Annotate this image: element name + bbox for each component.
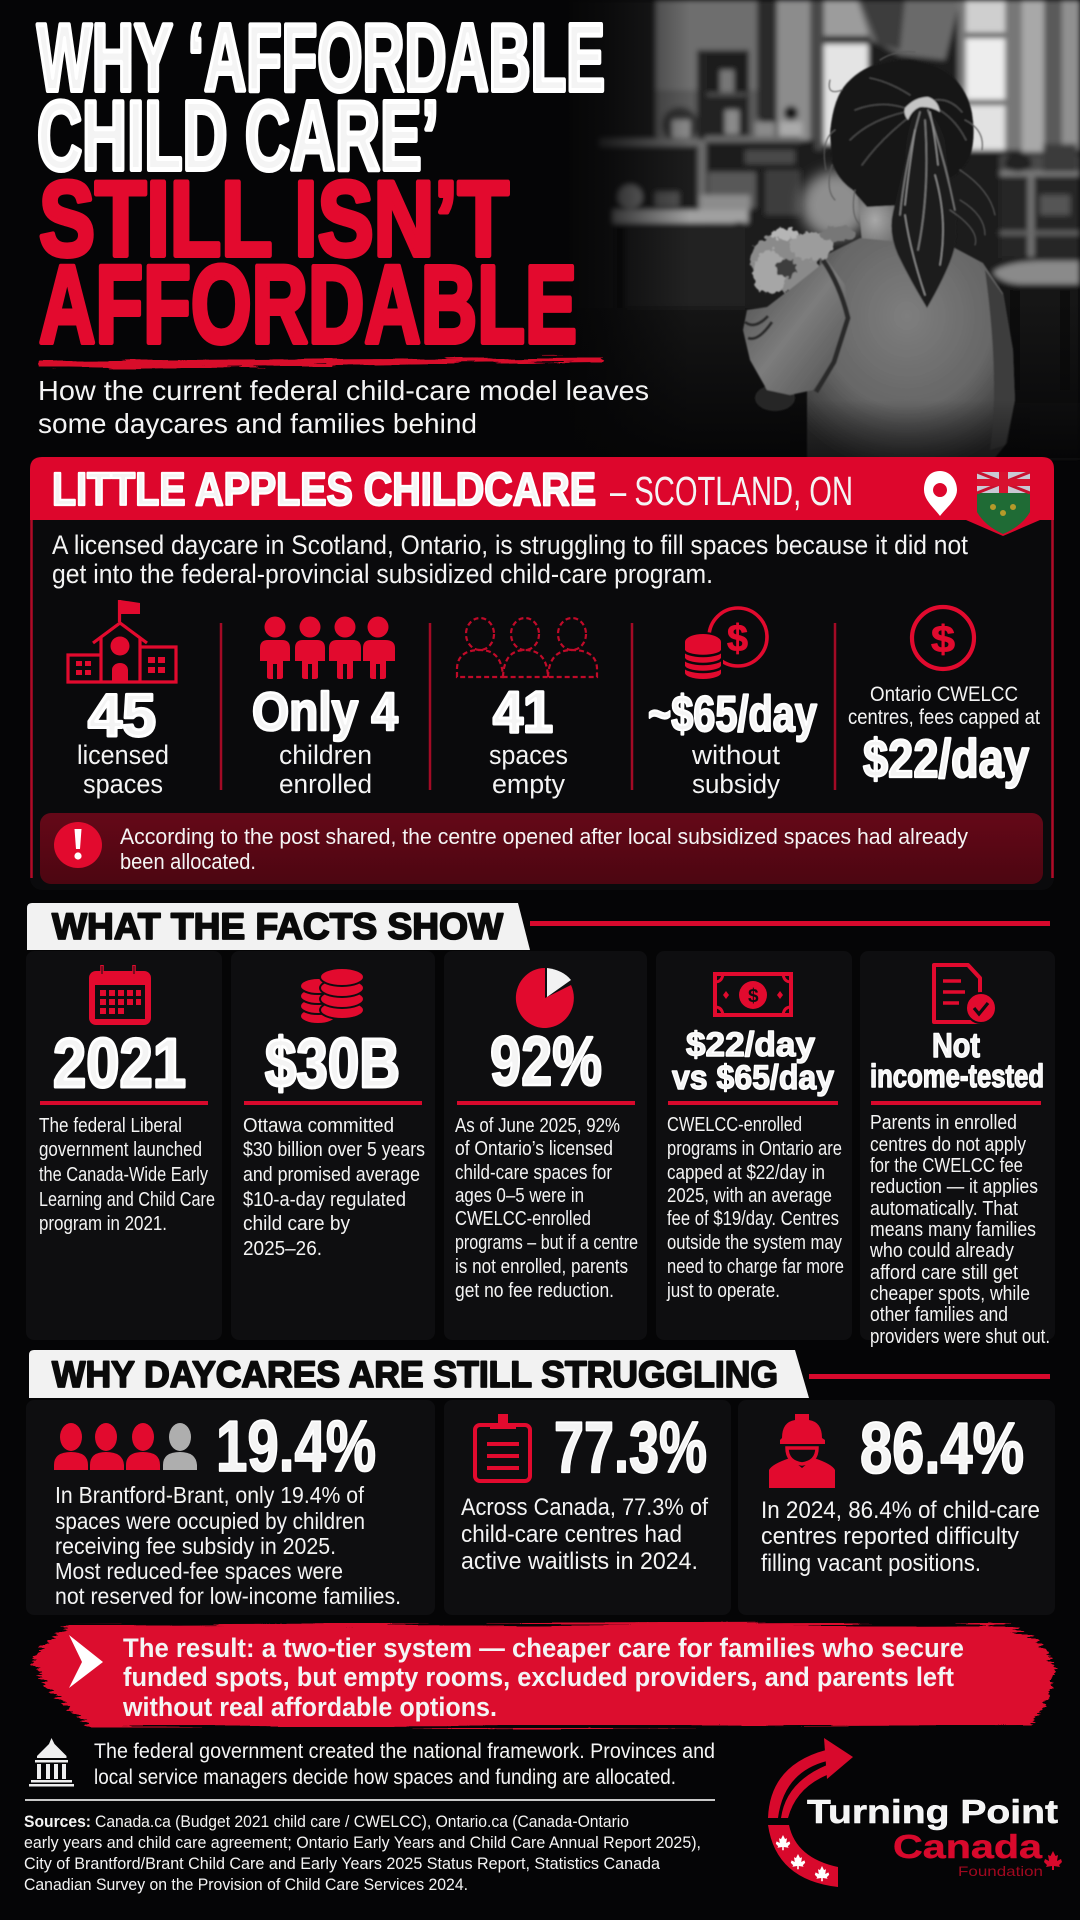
panel: 77.3% waitlists: 77.3% (554, 1408, 707, 1488)
government note: The federal government created the national framework. Provinces and (94, 1740, 715, 1763)
icon: worker with hard hat (769, 1414, 835, 1488)
government note: local service managers decide how spaces and funding are allocated. (94, 1766, 676, 1789)
panel: fact 2021: Learning and Child Care (39, 1189, 215, 1211)
panel: fact not income-tested: reduction — it applies (870, 1176, 1038, 1198)
scrunchie (904, 97, 940, 120)
stat: $22/day capped fee: centres, fees capped at (848, 706, 1040, 729)
callout: alert strip: According to the post shared, the centre opened after local subsidized spaces had already (120, 824, 969, 849)
tall bookcase (697, 50, 749, 140)
icon: maple leaf (1044, 1851, 1062, 1870)
brush underline (38, 357, 604, 368)
panel: fact not income-tested: means many families (870, 1219, 1036, 1241)
panel: fact $22/day vs $65/day: 2025, with an average (667, 1185, 832, 1207)
icon: location pin (924, 471, 957, 516)
stat: $22/day capped fee (848, 607, 1040, 789)
panel: fact not income-tested: Parents in enrolled (870, 1112, 1017, 1134)
subtitle: How the current federal child-care model leaves (38, 375, 649, 406)
photo: girl with teddy bear in empty classroom (560, 0, 1080, 460)
stat: only 4 children enrolled (252, 616, 398, 799)
heading: what the facts show (27, 903, 1050, 950)
torso (807, 238, 1015, 460)
stat: 45 licensed spaces: licensed (77, 740, 169, 770)
panel: fact $22/day vs $65/day: need to charge far more (667, 1256, 844, 1278)
panel: fact $30B (231, 951, 435, 1340)
sources: Sources: (24, 1812, 91, 1831)
stat: $22/day capped fee: Ontario CWELCC (870, 683, 1018, 706)
panel: fact not income-tested: centres do not apply (870, 1134, 1026, 1156)
stat: 45 licensed spaces: spaces (83, 769, 163, 799)
panel: fact $30B: 2025–26. (243, 1238, 322, 1260)
icon: government building (29, 1738, 74, 1786)
panel: fact $22/day vs $65/day (656, 951, 852, 1340)
logo: Turning Point Canada Foundation: Foundation (958, 1863, 1043, 1879)
logo: Turning Point Canada Foundation (768, 1738, 1062, 1887)
classroom background (570, 0, 1080, 458)
icon: chevron (69, 1635, 103, 1688)
panel: fact 2021: 2021 (53, 1024, 186, 1102)
panel: 19.4% subsidised spaces: Most reduced-fee spaces were (55, 1558, 343, 1584)
heading: why daycares are still struggling: WHY DAYCARES ARE STILL STRUGGLING (52, 1354, 778, 1395)
panel: fact not income-tested: who could already (869, 1240, 1014, 1262)
neck (858, 195, 900, 245)
panel: fact 92%: child-care spaces for (455, 1162, 612, 1184)
panel: fact 92%: programs – but if a centre (455, 1232, 638, 1254)
header banner (30, 457, 1054, 536)
panel: fact not income-tested: Not (932, 1027, 980, 1065)
table (613, 210, 748, 223)
panel: 77.3% waitlists: child-care centres had (461, 1521, 682, 1548)
panel: fact 92%: As of June 2025, 92% (455, 1115, 620, 1137)
result text: The result: a two-tier system — cheaper care for families who secure (123, 1633, 964, 1663)
icon: coins and dollar (684, 608, 767, 680)
header title: LITTLE APPLES CHILDCARE (52, 463, 596, 515)
panel: fact 2021: the Canada-Wide Early (39, 1164, 208, 1186)
stat: 41 spaces empty: empty (492, 769, 565, 799)
panel background (30, 457, 1054, 890)
panel: fact $22/day vs $65/day: outside the system may (667, 1232, 842, 1254)
panel: fact not income-tested: cheaper spots, while (870, 1283, 1030, 1305)
panel: fact 92% (444, 951, 647, 1340)
sources (24, 1812, 701, 1894)
icon: dollar circle: $ (931, 619, 955, 661)
panel: fact $22/day vs $65/day: programs in Ontario are (667, 1138, 842, 1160)
left and bottom fade (560, 0, 690, 458)
sources: Canada.ca (Budget 2021 child care / CWELCC), Ontario.ca (Canada-Ontario (95, 1812, 629, 1831)
description: A licensed daycare in Scotland, Ontario, is struggling to fill spaces because it did not (52, 530, 968, 560)
hair strands (824, 52, 995, 295)
panel: fact 92%: of Ontario’s licensed (455, 1138, 613, 1160)
title (37, 4, 605, 366)
stat: ~$65/day without subsidy: without (691, 740, 780, 770)
stat: ~$65/day without subsidy: subsidy (692, 769, 780, 799)
description: get into the federal-provincial subsidized child-care program. (52, 559, 713, 589)
panel: fact not income-tested: for the CWELCC fee (870, 1155, 1023, 1177)
panel: fact not income-tested: other families and (870, 1304, 1008, 1326)
logo: Turning Point Canada Foundation: Turning Point (807, 1793, 1058, 1830)
panel: fact not income-tested (860, 951, 1055, 1348)
panel: fact $22/day vs $65/day: $22/day (686, 1026, 815, 1064)
panel: fact $30B: child care by (243, 1213, 350, 1235)
panel: fact 2021 (26, 951, 222, 1340)
icon: calendar (89, 965, 151, 1025)
title: CHILD CARE’ (37, 80, 439, 190)
callout: alert strip: been allocated. (120, 849, 256, 874)
panel: fact $22/day vs $65/day: capped at $22/day in (667, 1162, 825, 1184)
heading: why daycares are still struggling (29, 1350, 1050, 1398)
stat: only 4 children enrolled: Only 4 (252, 682, 398, 742)
result text: without real affordable options. (122, 1692, 497, 1722)
panel: 19.4% subsidised spaces: 19.4% (216, 1407, 376, 1487)
icon: school (68, 600, 176, 682)
panel: fact not income-tested: automatically. That (870, 1198, 1018, 1220)
icon: pie chart (516, 968, 574, 1028)
sources: Canadian Survey on the Provision of Child Care Services 2024. (24, 1875, 468, 1894)
red brush (32, 1623, 1054, 1727)
panel: fact 92%: get no fee reduction. (455, 1280, 614, 1302)
teddy (751, 226, 856, 294)
subtitle: some daycares and families behind (38, 408, 477, 439)
panel: 86.4% staffing: 86.4% (860, 1409, 1024, 1489)
icon: people, three red one grey (54, 1423, 197, 1470)
panel: fact 92%: ages 0–5 were in (455, 1185, 584, 1207)
panel: fact 92%: CWELCC-enrolled (455, 1208, 591, 1230)
right table (1000, 283, 1080, 403)
stat: 41 spaces empty: 41 (493, 680, 553, 745)
title: WHY ‘AFFORDABLE (37, 4, 605, 112)
panel: 86.4% staffing: centres reported difficulty (761, 1523, 1019, 1550)
subtitle (38, 375, 649, 439)
icon: dollar circle (912, 607, 974, 669)
panel: fact 92%: is not enrolled, parents (455, 1256, 628, 1278)
icon: empty dashed seats (457, 618, 597, 677)
panel: fact $22/day vs $65/day: vs $65/day (672, 1059, 834, 1097)
panel: 19.4% subsidised spaces: spaces were occupied by children (55, 1508, 365, 1534)
logo arc and arrow (768, 1738, 853, 1887)
stat: 41 spaces empty: spaces (489, 740, 568, 770)
panel: fact $30B: $30B (265, 1024, 400, 1102)
stat: $22/day capped fee: $22/day (863, 729, 1029, 789)
panel: Little Apples Childcare (30, 457, 1054, 890)
panel: 77.3% waitlists (444, 1400, 731, 1615)
stat: only 4 children enrolled: enrolled (279, 769, 372, 799)
panel: fact $30B: $30 billion over 5 years (243, 1139, 425, 1161)
hand below (755, 385, 795, 411)
panel: fact 2021: The federal Liberal (39, 1115, 182, 1137)
girl figure (743, 52, 1015, 460)
panel: 86.4% staffing (738, 1400, 1055, 1615)
panel: fact $22/day vs $65/day: just to operate. (666, 1280, 780, 1302)
heading: what the facts show: WHAT THE FACTS SHOW (52, 906, 503, 947)
arm (743, 260, 848, 395)
stat: ~$65/day without subsidy: ~$65/day (648, 686, 817, 742)
icon: four children (260, 616, 395, 679)
panel: fact $30B: and promised average (243, 1164, 420, 1186)
icon: checked document (934, 965, 996, 1023)
light behind neck (801, 171, 869, 239)
stat: 41 spaces empty (457, 618, 597, 799)
hair (830, 60, 974, 207)
low shelves (600, 140, 815, 215)
right shelves (1000, 155, 1080, 175)
panel: 86.4% staffing: filling vacant positions. (761, 1550, 981, 1577)
ponytail (891, 108, 957, 308)
panel: fact not income-tested: afford care still get (870, 1262, 1018, 1284)
sources: City of Brantford/Brant Child Care and Early Years 2025 Status Report, Statistics Canada (24, 1854, 661, 1873)
title: STILL ISN’T (39, 158, 509, 278)
panel: 77.3% waitlists: Across Canada, 77.3% of (461, 1494, 708, 1521)
callout: alert strip (40, 813, 1043, 884)
stat: 45 licensed spaces: 45 (88, 682, 156, 749)
result text (122, 1633, 964, 1722)
icon: coins and dollar: $ (727, 618, 748, 660)
icon: Ontario shield (977, 472, 1030, 534)
icon: clipboard (475, 1414, 530, 1481)
icon: exclamation (54, 822, 102, 868)
panel: fact $30B: Ottawa committed (243, 1115, 394, 1137)
stat: only 4 children enrolled: children (279, 740, 372, 770)
panel: fact 2021: program in 2021. (39, 1213, 167, 1235)
panel: 19.4% subsidised spaces: receiving fee subsidy in 2025. (55, 1533, 336, 1559)
stat: ~$65/day without subsidy (648, 608, 817, 799)
government note (94, 1740, 715, 1789)
floor (570, 308, 1000, 458)
panel: 77.3% waitlists: active waitlists in 2024. (461, 1548, 698, 1575)
result text: funded spots, but empty rooms, excluded providers, and parents left (123, 1662, 954, 1692)
panel: 19.4% subsidised spaces: In Brantford-Brant, only 19.4% of (55, 1482, 365, 1508)
sources: early years and child care agreement; Ontario Early Years and Child Care Annual Report 2025), (24, 1833, 701, 1852)
panel: 86.4% staffing: In 2024, 86.4% of child-care (761, 1497, 1040, 1524)
panel: 19.4% subsidised spaces: not reserved for low-income families. (55, 1583, 401, 1609)
icon: banknote: $ (748, 986, 759, 1007)
logo: Turning Point Canada Foundation: Canada (893, 1828, 1043, 1865)
panel: fact not income-tested: providers were shut out. (870, 1326, 1050, 1348)
header title: – SCOTLAND, ON (610, 468, 853, 514)
callout: the result brush banner (32, 1623, 1054, 1727)
panel: fact 92%: 92% (490, 1022, 602, 1100)
panel: 19.4% subsidised spaces (26, 1400, 435, 1615)
panel: fact $22/day vs $65/day: CWELCC-enrolled (667, 1114, 802, 1136)
description (52, 530, 968, 589)
stat: 45 licensed spaces (68, 600, 176, 799)
panel: fact 2021: government launched (39, 1139, 202, 1161)
title: AFFORDABLE (39, 244, 577, 366)
panel: fact $30B: $10-a-day regulated (243, 1189, 406, 1211)
icon: banknote (715, 974, 791, 1015)
stat dividers (221, 623, 835, 790)
panel: fact $22/day vs $65/day: fee of $19/day. Centres (667, 1208, 839, 1230)
icon: coin stack (300, 968, 364, 1024)
